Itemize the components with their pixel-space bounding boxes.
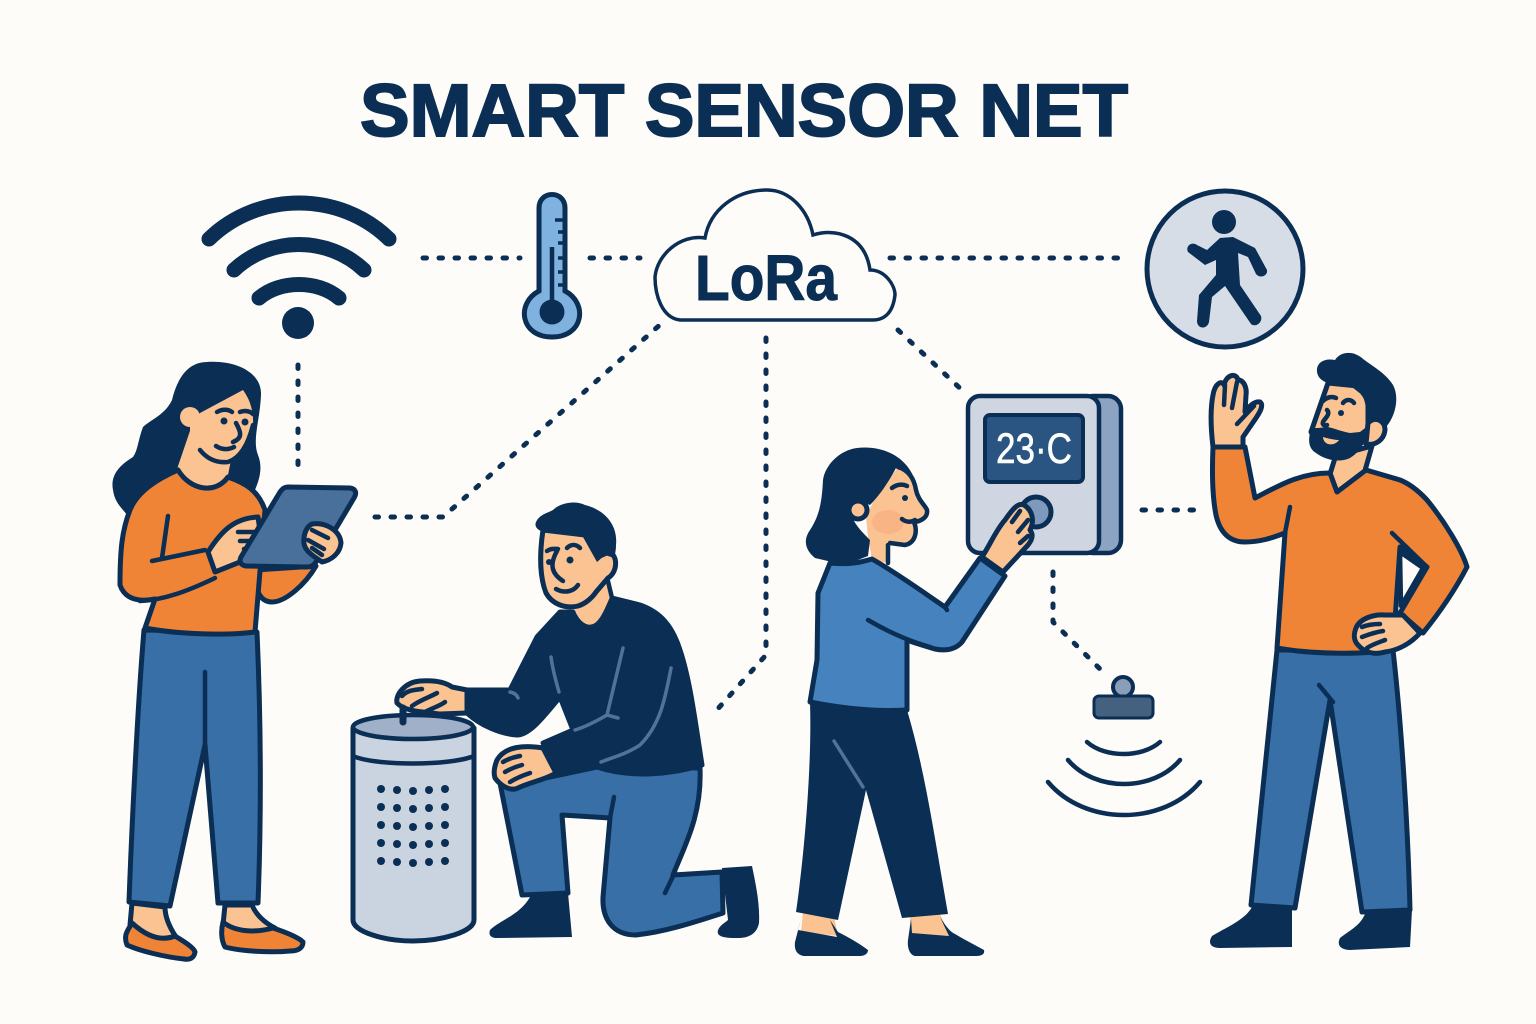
ear	[1366, 419, 1385, 444]
boots	[1210, 907, 1292, 948]
person: man waving	[1210, 353, 1467, 950]
cheek blush	[872, 510, 904, 534]
raised hand	[1211, 375, 1262, 447]
dotted network connections	[298, 258, 1195, 712]
feet and shoes	[801, 912, 838, 936]
sweater	[120, 470, 265, 634]
icon: wifi	[209, 203, 389, 339]
pants	[796, 703, 948, 920]
thermostat screen	[985, 415, 1083, 482]
thermostat device	[968, 396, 1121, 553]
hand on bin lid	[397, 681, 467, 714]
face features	[1323, 397, 1354, 425]
sleeve gap	[1400, 552, 1423, 606]
hair	[535, 503, 616, 562]
neck and face	[176, 425, 232, 492]
mouth	[1323, 437, 1339, 444]
far sleeve	[255, 566, 316, 602]
collar and side seam	[1285, 470, 1366, 533]
sweater	[467, 598, 702, 774]
hand on hip	[1354, 615, 1420, 653]
orange sweater	[1212, 447, 1467, 653]
cloud label: LoRa	[695, 242, 837, 314]
icon: LoRa cloud	[655, 190, 895, 320]
face	[1311, 383, 1368, 455]
person: woman with tablet	[112, 362, 356, 959]
tablet	[240, 487, 356, 567]
far hand	[304, 524, 341, 562]
hair	[112, 362, 261, 517]
icon: thermometer	[524, 194, 580, 337]
pants	[129, 630, 260, 906]
icon: wireless beacon sensor	[1048, 677, 1200, 815]
feet and shoes	[130, 903, 176, 940]
bin grille dots	[377, 785, 449, 867]
hair	[1317, 353, 1396, 428]
smart bin sensor	[353, 715, 474, 941]
near hand	[208, 517, 262, 572]
hair	[806, 447, 914, 565]
beard	[1309, 425, 1369, 460]
boots	[489, 893, 572, 938]
dial	[1021, 497, 1051, 527]
person: woman at thermostat	[795, 396, 1121, 956]
pants	[500, 767, 723, 935]
title: SMART SENSOR NET	[360, 69, 1128, 152]
pants	[1251, 650, 1410, 912]
sweater fold lines	[510, 648, 671, 762]
icon: motion sensor pedestrian	[1147, 191, 1303, 347]
hand on knee	[494, 747, 556, 789]
neck	[572, 572, 611, 625]
face	[541, 530, 616, 607]
blue sweater	[810, 558, 1005, 711]
neck and face	[866, 467, 928, 563]
person: kneeling man	[397, 503, 759, 938]
temperature reading: 23·C	[996, 425, 1072, 473]
neck	[1330, 446, 1372, 492]
reaching hand	[982, 504, 1032, 572]
